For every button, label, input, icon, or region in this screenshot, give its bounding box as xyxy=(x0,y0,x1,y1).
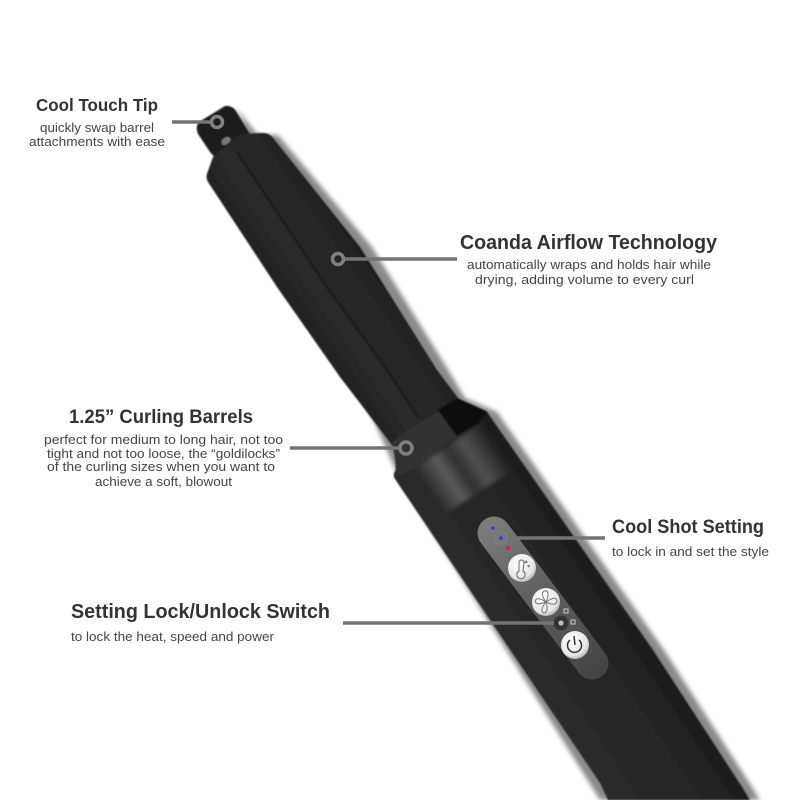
callout: 1.25 inch Curling Barrels xyxy=(44,406,412,489)
description: tight and not too loose, the “goldilocks” xyxy=(47,446,280,461)
leader line xyxy=(343,621,554,625)
description: drying, adding volume to every curl xyxy=(475,272,694,287)
callout: Cool Shot Setting xyxy=(495,517,769,559)
curling wand device xyxy=(197,106,760,800)
description: to lock the heat, speed and power xyxy=(71,629,275,644)
icon: lock switch xyxy=(554,609,575,630)
LED indicators xyxy=(491,526,510,550)
description: automatically wraps and holds hair while xyxy=(467,257,711,272)
description: quickly swap barrel xyxy=(40,120,154,135)
collar ring xyxy=(415,425,508,513)
callout: Cool Touch Tip xyxy=(29,95,222,149)
heading: Setting Lock/Unlock Switch xyxy=(71,601,330,623)
heading: Cool Shot Setting xyxy=(612,517,764,538)
icon: power button xyxy=(561,631,589,659)
cool touch tip cap xyxy=(197,106,250,158)
callout: Setting Lock/Unlock Switch xyxy=(71,601,554,644)
heading: 1.25” Curling Barrels xyxy=(69,406,253,428)
leader line xyxy=(332,254,457,264)
description: achieve a soft, blowout xyxy=(95,474,232,489)
description xyxy=(467,257,711,287)
neck band xyxy=(392,411,458,478)
callout: Coanda Airflow Technology xyxy=(332,231,718,287)
description xyxy=(29,120,165,149)
wand drop shadow xyxy=(236,108,760,800)
description: to lock in and set the style xyxy=(612,544,769,559)
control panel xyxy=(491,526,592,663)
heading: Coanda Airflow Technology xyxy=(460,231,718,254)
icon: fan button xyxy=(532,588,560,616)
leader line xyxy=(290,442,412,454)
barrel groove xyxy=(237,152,418,417)
main body xyxy=(392,398,750,800)
description: attachments with ease xyxy=(29,134,165,149)
description xyxy=(44,432,283,489)
icon: thermometer button xyxy=(508,554,536,582)
leader line xyxy=(495,532,605,544)
leader line xyxy=(172,116,222,128)
heading: Cool Touch Tip xyxy=(36,95,158,115)
black neck shadow xyxy=(438,398,487,436)
description: of the curling sizes when you want to xyxy=(47,459,275,474)
description: perfect for medium to long hair, not too xyxy=(44,432,283,447)
barrel xyxy=(206,133,458,445)
